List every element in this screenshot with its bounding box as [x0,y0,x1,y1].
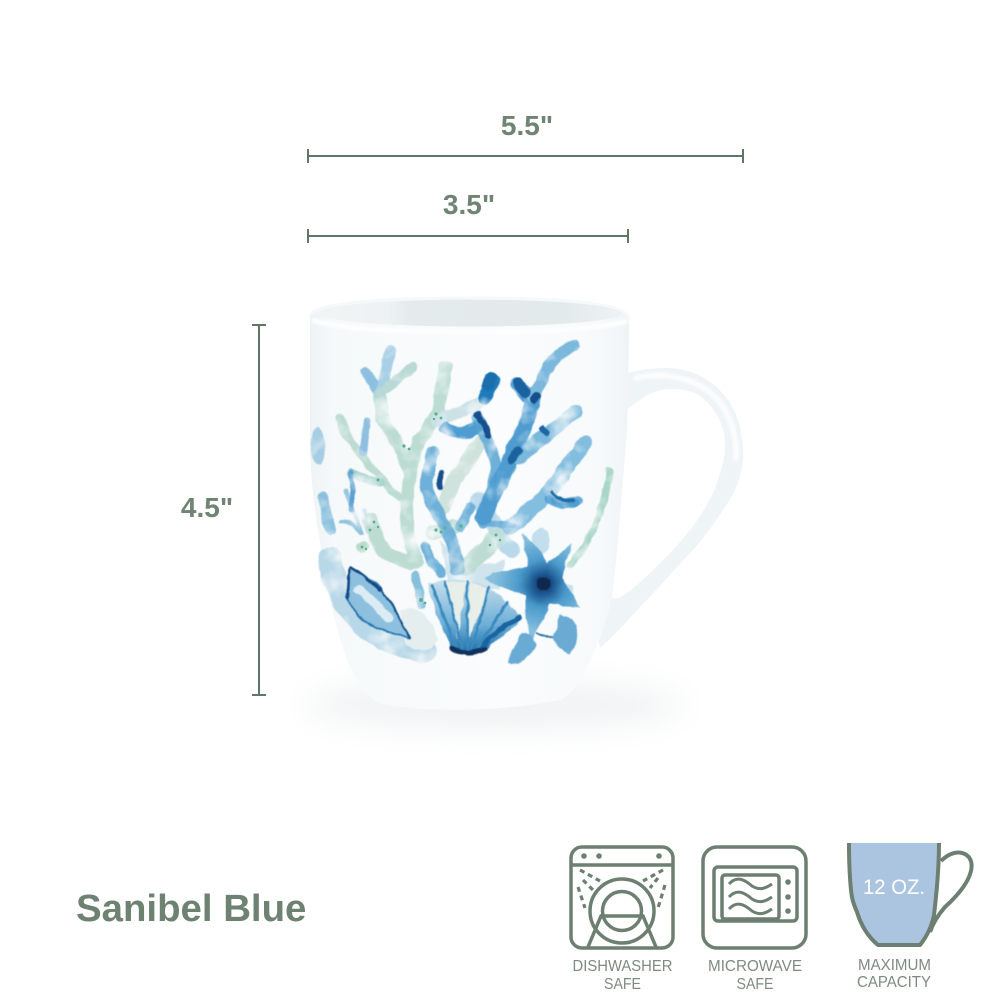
coral illustration [311,345,610,664]
label: microwave safe: MICROWAVE [708,958,802,975]
pale wash [311,428,610,650]
mug shadow [305,681,685,729]
mug inner rim [319,300,623,326]
round pale shell [400,608,438,650]
conch shell [347,568,410,638]
dimension: 3.5 inch diameter: 3.5" [443,189,495,220]
pale green coral [340,350,497,568]
icon: dishwasher safe: SAFE [604,976,641,993]
coral fan tail [508,633,536,664]
dimension: 5.5 inch width [308,110,743,163]
label: maximum capacity: MAXIMUM [858,957,931,974]
dimension: 5.5 inch width: 5.5" [501,110,553,141]
label: dishwasher safe: DISHWASHER [572,958,672,975]
icon: maximum capacity: CAPACITY [857,974,931,991]
scallop shell [428,580,520,653]
green speckles [361,412,501,604]
mid blue coral [415,417,513,606]
dimension: 4.5 inch height [181,325,266,695]
product name: Sanibel Blue [76,887,306,930]
deep blue coral [445,345,585,527]
mug body [310,297,629,710]
icon: maximum capacity: 12 OZ. [863,876,925,899]
dimension: 3.5 inch diameter [308,189,628,243]
icon: maximum capacity [849,843,972,991]
dimension: 4.5 inch height: 4.5" [181,492,233,523]
starfish [485,528,580,644]
icon: microwave safe: SAFE [736,976,774,993]
mug photo [305,297,743,729]
mug handle [590,368,743,648]
icon: dishwasher safe [571,847,673,993]
coral dark accents [440,377,574,500]
small fan shell [537,615,577,655]
icon: microwave safe [703,847,806,993]
